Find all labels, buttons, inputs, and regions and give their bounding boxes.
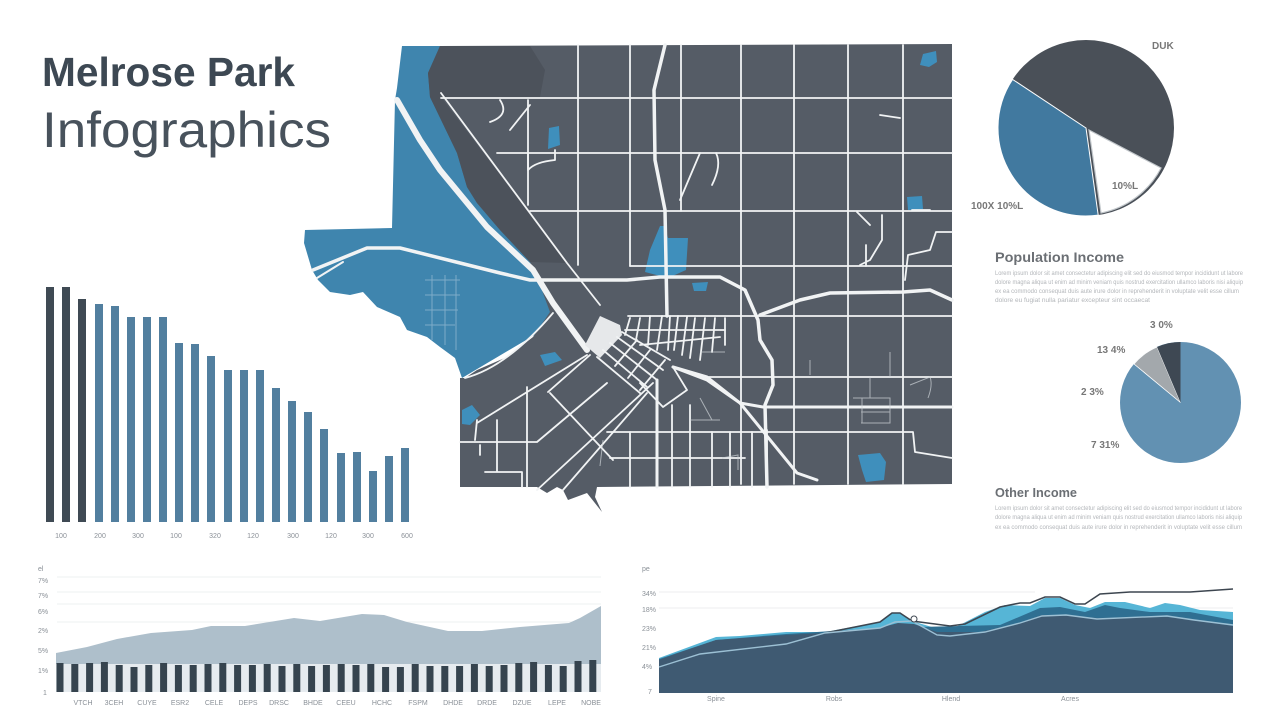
pie labels [1081, 320, 1173, 451]
pie labels: 2 3% [1081, 387, 1104, 398]
bar chart: left [46, 287, 413, 540]
area chart: bottom right [642, 566, 1233, 703]
axis labels: 7% [38, 578, 48, 585]
axis labels: 1% [38, 668, 48, 675]
map: darker north-west land [428, 46, 567, 263]
combo chart: bottom left: NOBE [581, 700, 601, 707]
pie chart: middle right [1081, 320, 1241, 463]
combo chart: bottom left: FSPM [408, 700, 428, 707]
bar chart labels: 300 [132, 533, 144, 540]
map: ponds [462, 51, 937, 482]
axis labels: pe [642, 566, 650, 573]
text block: other income: dolore magna aliqua ut enim ad minim veniam quis nostrud exercitation ullamco laboris nisi aliquip [995, 515, 1243, 521]
bar series [56, 660, 596, 692]
pie labels: 7 31% [1091, 440, 1119, 451]
pie chart: top [971, 40, 1174, 216]
combo chart: bottom left: DZUE [512, 700, 532, 707]
bar chart labels: 100 [55, 533, 67, 540]
dark area series [659, 615, 1233, 693]
combo chart: bottom left: CELE [205, 700, 223, 707]
map: water and west area [304, 46, 560, 378]
map: main roads [313, 45, 952, 487]
text block: other income: Other Income [995, 485, 1077, 500]
axis labels: 2% [38, 628, 48, 635]
map: city land [428, 44, 952, 512]
text block: population income: ex ea commodo consequat duis aute irure dolor in reprehenderit in voluptate velit esse cillum [995, 289, 1239, 295]
pie labels [971, 41, 1174, 212]
combo chart: bottom left: BHDE [303, 700, 323, 707]
mid blue area series [659, 605, 1233, 693]
bar chart labels: 120 [247, 533, 259, 540]
combo chart: bottom left: HCHC [372, 700, 392, 707]
text block: population income: Population Income [995, 249, 1124, 265]
combo chart: bottom left: CEEU [336, 700, 356, 707]
axis labels: 6% [38, 609, 48, 616]
map: faint west streets [425, 275, 460, 350]
text block: population income: Lorem ipsum dolor sit amet consectetur adipiscing elit sed do eiusmod tempor incididunt ut labore [995, 271, 1244, 277]
bar chart labels: 600 [401, 533, 413, 540]
combo chart: bottom left: LEPE [548, 700, 566, 707]
combo chart: bottom left: DHDE [443, 700, 463, 707]
combo chart: bottom left: ESR2 [171, 700, 189, 707]
map of Melrose Park [304, 44, 952, 512]
bar chart labels: 300 [362, 533, 374, 540]
axis labels: 7 [648, 689, 652, 696]
text block: population income: dolore eu fugiat nulla pariatur excepteur sint occaecat [995, 298, 1150, 304]
bar chart labels: 300 [287, 533, 299, 540]
map: street grid [441, 45, 952, 490]
bar chart labels: 120 [325, 533, 337, 540]
area chart: bottom right: Robs [826, 696, 843, 703]
axis labels: 7% [38, 593, 48, 600]
pie labels: 13 4% [1097, 345, 1125, 356]
area chart: bottom right: Spine [707, 696, 725, 703]
axis labels: 34% [642, 591, 656, 598]
axis labels: 4% [642, 664, 652, 671]
axis labels: 21% [642, 645, 656, 652]
combo chart: bottom left: 3CEH [105, 700, 123, 707]
area chart: bottom right: Hlend [942, 696, 960, 703]
bar chart labels: 200 [94, 533, 106, 540]
light line series [659, 615, 1233, 667]
text block: other income: Lorem ipsum dolor sit amet consectetur adipiscing elit sed do eiusmod tempor incididunt ut labore [995, 506, 1243, 512]
axis labels [38, 566, 48, 697]
bar chart labels [55, 533, 413, 540]
title [42, 49, 331, 158]
combo chart: bottom left: DEPS [238, 700, 258, 707]
area chart: bottom right: Acres [1061, 696, 1079, 703]
text block: other income [995, 485, 1243, 531]
dark line series [825, 589, 1233, 633]
text block: population income [995, 249, 1244, 304]
pie labels: 100X 10%L [971, 201, 1023, 212]
text block: other income: ex ea commodo consequat duis aute irure dolor in reprehenderit in voluptate velit esse cillum [995, 525, 1242, 531]
map: downtown grid [585, 316, 725, 407]
map: faint street details [600, 352, 931, 470]
combo chart: bottom left: CUYE [137, 700, 157, 707]
pie labels: DUK [1152, 41, 1174, 52]
pie labels: 3 0% [1150, 320, 1173, 331]
bar chart labels: 320 [209, 533, 221, 540]
combo chart: bottom left: DRDE [477, 700, 497, 707]
combo chart: bottom left: VTCH [73, 700, 93, 707]
axis labels [642, 566, 656, 696]
cyan area series [659, 598, 1233, 693]
text block: population income: dolore magna aliqua ut enim ad minim veniam quis nostrud exercitation ullamco laboris nisi aliquip [995, 280, 1244, 286]
combo chart: bottom left [38, 566, 601, 707]
bar chart labels: 100 [170, 533, 182, 540]
axis labels: 1 [43, 690, 47, 697]
axis labels: el [38, 566, 44, 573]
axis labels: 5% [38, 648, 48, 655]
axis labels: 23% [642, 626, 656, 633]
area series [56, 606, 601, 664]
axis labels: 18% [642, 607, 656, 614]
pie labels: 10%L [1112, 181, 1138, 192]
combo chart: bottom left: DRSC [269, 700, 289, 707]
title: Melrose Park [42, 49, 295, 95]
marker [911, 616, 917, 622]
title: Infographics [42, 102, 331, 158]
